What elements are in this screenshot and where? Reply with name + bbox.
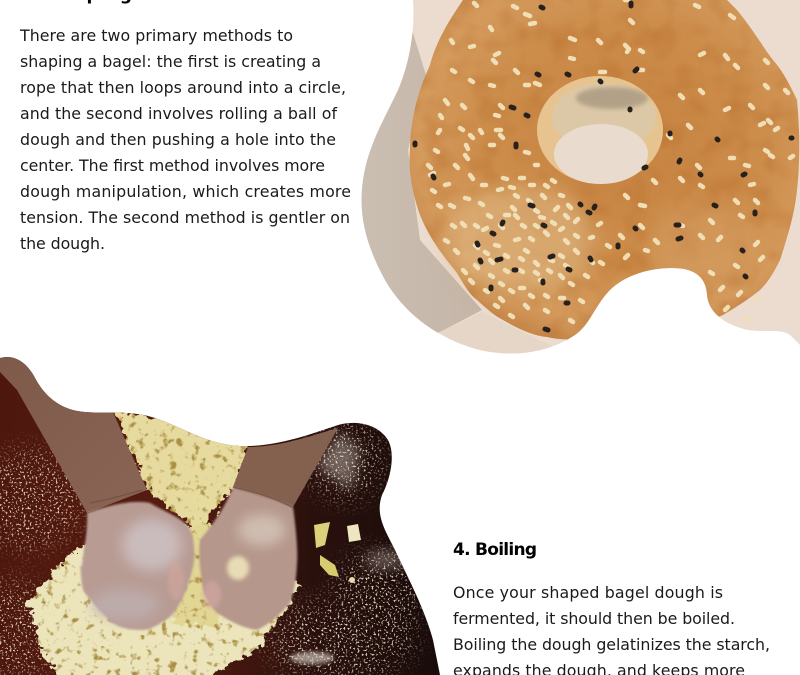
text block: section 4 boiling — [453, 540, 770, 675]
heading: 4. Boiling: 4. Boiling — [453, 540, 537, 560]
flour highlights on hands — [90, 487, 292, 621]
sesame seeds light — [428, 0, 793, 322]
paragraph: boiling — [453, 583, 770, 675]
left arm — [0, 357, 147, 513]
right arm — [233, 428, 338, 507]
paragraph: boiling: Once your shaped bagel dough is — [453, 583, 723, 602]
bagel body — [410, 0, 799, 340]
paragraph: shaping methods: shaping a bagel: the first is creating a — [20, 52, 321, 71]
photo: sesame bagel in blob shape — [350, 0, 800, 362]
crumbly dough — [28, 410, 300, 675]
text block: section 3 shaping — [19, 0, 351, 253]
paragraph: shaping methods: and the second involves rolling a ball of — [20, 104, 337, 123]
paragraph: shaping methods: tension. The second method is gentler on — [20, 208, 350, 227]
photo: hands kneading dough in blob shape — [0, 350, 445, 675]
sesame seeds dark — [415, 3, 792, 330]
paragraph: shaping methods: rope that then loops around into a circle, — [20, 78, 346, 97]
paragraph: shaping methods: the dough. — [20, 234, 105, 253]
right hand — [199, 487, 297, 630]
paragraph: boiling: Boiling the dough gelatinizes the starch, — [453, 635, 770, 654]
paragraph: shaping methods: dough manipulation, which creates more — [20, 182, 351, 201]
paragraph: shaping methods: There are two primary methods to — [19, 26, 293, 45]
dough lumps on table — [314, 522, 361, 583]
paragraph: boiling: fermented, it should then be boiled. — [453, 609, 735, 628]
flour on table — [0, 420, 425, 675]
left hand — [81, 502, 194, 630]
paragraph: shaping methods: center. The first method involves more — [20, 156, 325, 175]
paragraph: shaping methods — [19, 26, 351, 253]
paragraph: shaping methods: dough and then pushing a hole into the — [20, 130, 336, 149]
bagel hole — [537, 76, 663, 184]
